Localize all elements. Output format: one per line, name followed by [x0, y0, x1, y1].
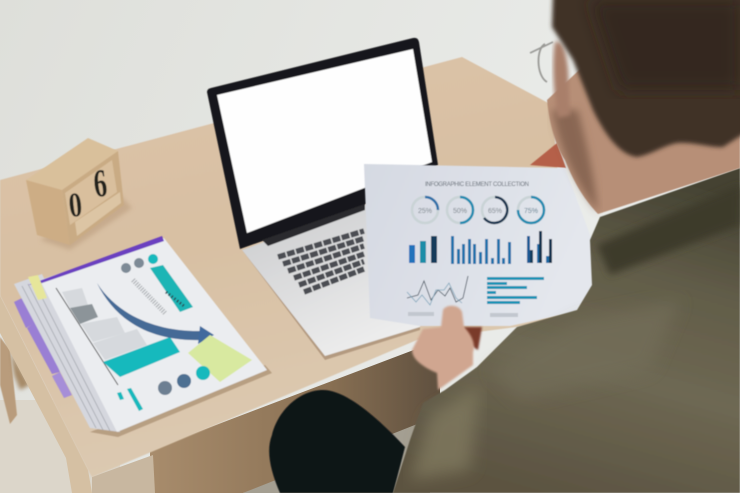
laptop lid bezel	[207, 38, 438, 249]
calendar number 0: 0	[67, 185, 84, 225]
calendar bottom plate	[75, 192, 121, 236]
donut 25%: 25%	[418, 208, 432, 215]
purple strip	[28, 236, 164, 285]
man ear	[553, 42, 570, 118]
calendar top face	[26, 138, 118, 190]
calendar side face	[26, 180, 70, 245]
curved arrow	[97, 283, 202, 340]
lower sheets	[14, 274, 120, 432]
donut 65%: 65%	[488, 208, 502, 215]
document stack	[14, 236, 272, 437]
donut 65%	[482, 197, 508, 223]
shirt shoulder highlight	[490, 300, 680, 400]
laptop base lip	[242, 250, 420, 360]
donut 75%: 75%	[524, 208, 538, 215]
chart axis	[56, 288, 118, 385]
collar shadow	[597, 185, 740, 275]
purple tabs	[14, 295, 40, 328]
teal panel	[150, 265, 193, 312]
teal bar	[103, 337, 180, 377]
wooden calendar	[26, 138, 132, 250]
table apron under desk	[150, 340, 440, 493]
sheet title: INFOGRAPHIC ELEMENT COLLECTION	[425, 182, 529, 188]
horizontal bar chart	[487, 277, 544, 304]
calendar front frame	[62, 151, 124, 245]
bar chart 2	[451, 236, 511, 264]
shadow behind table side	[10, 350, 30, 390]
bottom circles	[158, 381, 172, 395]
fingers behind sheet	[463, 327, 482, 350]
donut 25%	[412, 197, 438, 223]
hinge	[262, 204, 365, 246]
stack shadow	[90, 365, 272, 437]
keyboard keys	[278, 231, 364, 292]
man shirt	[393, 168, 740, 493]
line chart	[407, 276, 468, 305]
infographic sheet held by man	[364, 164, 594, 326]
table front leg	[92, 455, 155, 493]
laptop	[207, 38, 440, 360]
arrow head	[198, 326, 214, 344]
calendar shadow	[40, 195, 132, 250]
small teal bars	[127, 388, 143, 411]
sheet edges	[22, 282, 110, 431]
donut 50%: 50%	[453, 208, 467, 215]
laptop base	[242, 200, 440, 356]
white screen	[217, 49, 432, 233]
top circles	[121, 263, 131, 273]
bar chart 3	[527, 231, 552, 263]
glasses	[530, 42, 553, 82]
table side band	[0, 296, 92, 493]
grey bars	[62, 288, 88, 308]
text lines on panel	[133, 280, 165, 313]
hand holding sheet	[412, 306, 474, 390]
yellow sticky note	[188, 335, 252, 382]
teal panel data	[166, 292, 184, 306]
floor	[0, 400, 120, 493]
calendar blocks	[65, 160, 117, 225]
donut 50%	[447, 197, 473, 223]
table leg left	[0, 337, 17, 424]
main sheet	[40, 238, 267, 432]
jaw shadow	[552, 110, 598, 212]
man hair	[552, 0, 740, 157]
floor under desk	[243, 417, 430, 493]
donut 75%	[518, 197, 544, 223]
shirt sleeve highlight	[410, 385, 480, 480]
sheet footer legends	[408, 312, 518, 317]
calendar number 6: 6	[91, 162, 109, 206]
table top	[0, 57, 570, 477]
trousers	[269, 390, 405, 493]
sheet	[364, 164, 594, 326]
dark hair crown	[590, 0, 740, 90]
man neck	[547, 60, 740, 214]
fingers behind paper	[530, 143, 566, 168]
small yellow note	[28, 275, 47, 300]
bar chart 1	[409, 236, 437, 263]
